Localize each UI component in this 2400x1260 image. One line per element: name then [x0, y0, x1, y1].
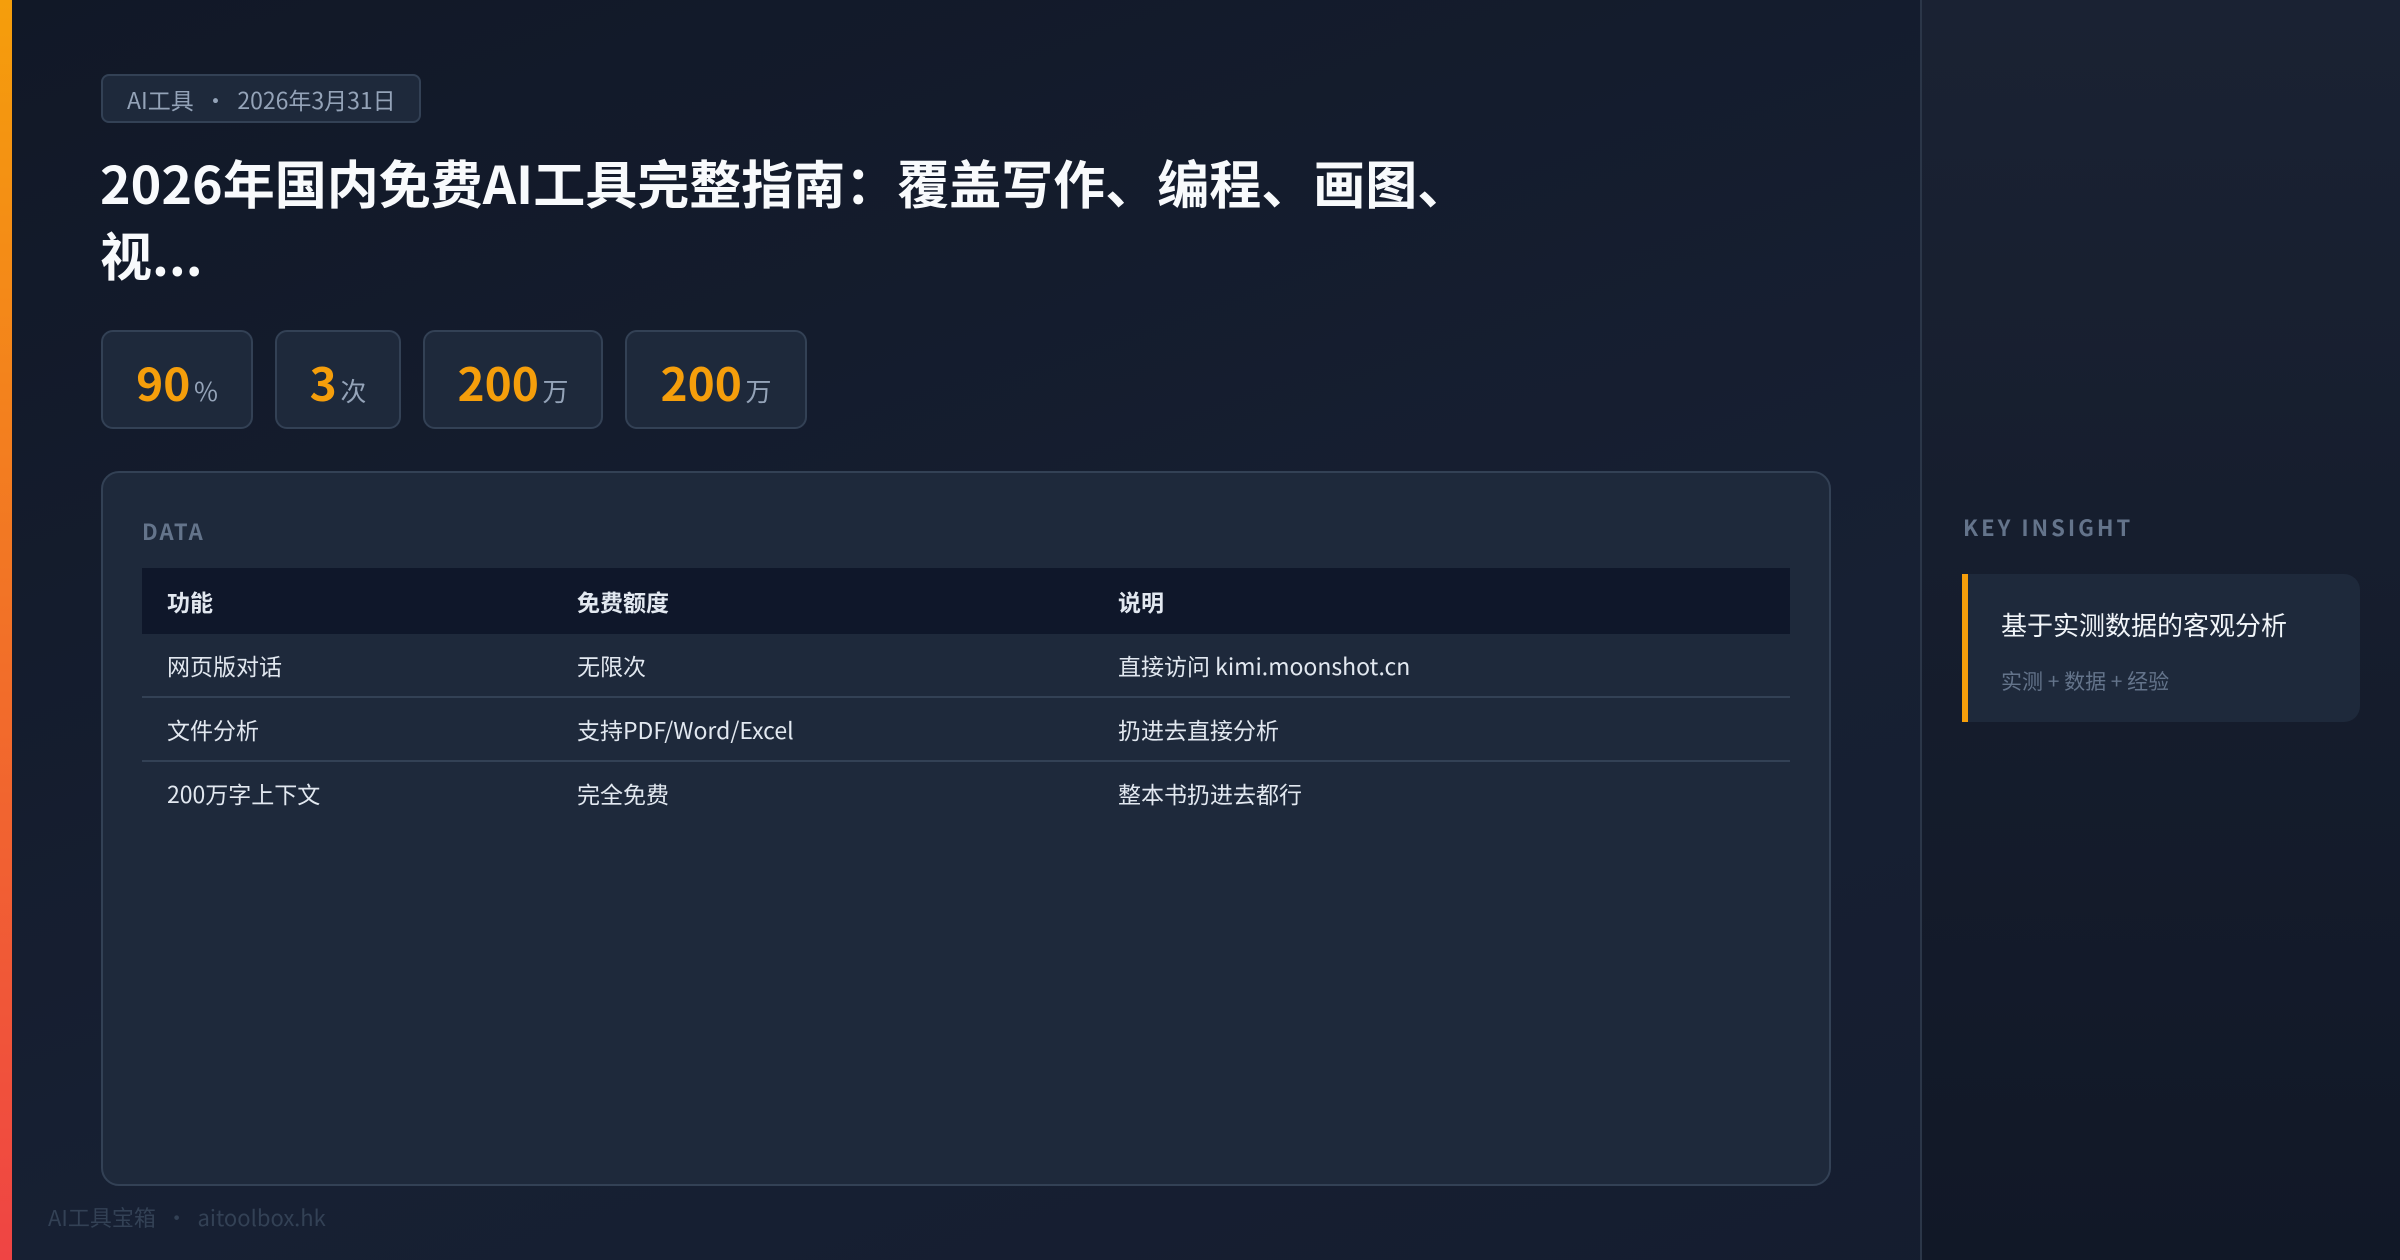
sidebar heading: KEY INSIGHT — [1963, 511, 2133, 543]
right sidebar background — [1920, 0, 2400, 1260]
panel label: DATA — [142, 515, 205, 547]
table: 无限次 — [577, 648, 646, 682]
stat: 200万: 200 万 — [660, 349, 772, 415]
table: 说明 — [1118, 584, 1164, 618]
stat: 3次 — [275, 330, 401, 429]
table: 文件分析 — [167, 712, 259, 746]
insight card: 实测 + 数据 + 经验 — [2001, 666, 2169, 696]
table: 200万字上下文 — [167, 776, 320, 810]
table: 网页版对话 — [167, 648, 282, 682]
table: 功能 — [167, 584, 213, 618]
stat: 3次: 3 次 — [310, 349, 366, 415]
stat: 90% — [101, 330, 253, 429]
tag: AI工具 · 2026年3月31日 — [127, 82, 396, 116]
title: 2026年国内免费AI工具完整指南：覆盖写作、编程、画图、 — [100, 144, 1469, 219]
stat: 200万 — [625, 330, 807, 429]
accent bar — [0, 0, 12, 1260]
stat: 200万 — [423, 330, 603, 429]
tag — [101, 74, 421, 123]
insight card — [1962, 574, 2360, 722]
table: 直接访问 kimi.moonshot.cn — [1118, 648, 1410, 682]
stats row — [101, 330, 807, 429]
title: 视... — [100, 216, 203, 291]
stat: 90%: 90 % — [136, 349, 218, 415]
panel: data — [101, 471, 1831, 1186]
table: 扔进去直接分析 — [1118, 712, 1279, 746]
table: 支持PDF/Word/Excel — [577, 712, 794, 746]
footer: AI工具宝箱 · aitoolbox.hk — [48, 1201, 326, 1233]
table: 免费额度 — [577, 584, 669, 618]
table — [142, 568, 1790, 810]
insight card: 基于实测数据的客观分析 — [2001, 606, 2287, 643]
stat: 200万: 200 万 — [457, 349, 569, 415]
table: 完全免费 — [577, 776, 669, 810]
title — [100, 144, 1469, 291]
table: 整本书扔进去都行 — [1118, 776, 1302, 810]
